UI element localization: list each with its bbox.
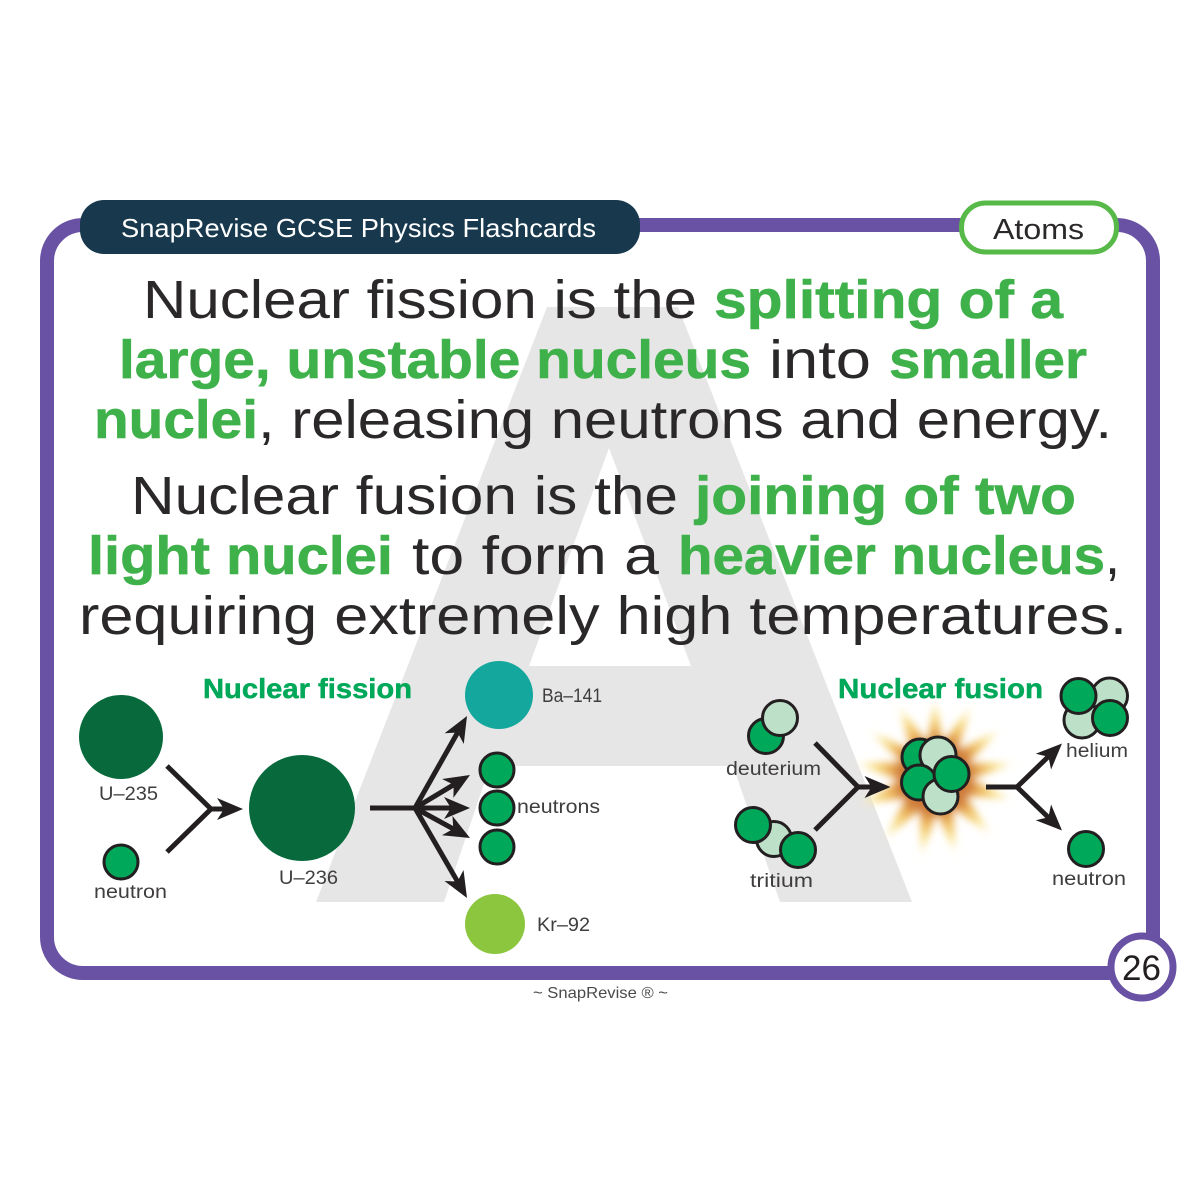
page number badge: 26 — [1122, 949, 1161, 988]
Kr-92 nucleus — [465, 894, 590, 954]
text block: nuclear fusion definition: requiring extremely high temperatures. — [79, 586, 1127, 646]
tritium: tritium — [750, 871, 813, 892]
incoming neutron: neutron — [94, 882, 167, 903]
text block: nuclear fission definition: Nuclear fission is the — [143, 270, 697, 330]
released neutrons — [480, 753, 600, 864]
incoming neutron — [94, 845, 167, 903]
U-235 nucleus: U–235 — [99, 784, 158, 805]
released neutrons: neutrons — [517, 797, 600, 818]
text block: nuclear fusion definition: light nuclei — [88, 526, 393, 586]
Ba-141 nucleus: Ba–141 — [542, 686, 602, 707]
card border — [47, 225, 1153, 973]
text block: nuclear fusion definition — [79, 466, 1127, 646]
Kr-92 nucleus: Kr–92 — [537, 915, 590, 936]
text block: nuclear fission definition: into — [769, 330, 871, 390]
text block: nuclear fission definition: nuclei — [94, 390, 258, 450]
text block: nuclear fission definition: large, unstable nucleus — [119, 330, 751, 390]
released neutron: neutron — [1052, 869, 1126, 890]
released neutron — [1052, 832, 1126, 890]
footer brand: ~ SnapRevise ® ~ — [533, 985, 668, 1002]
helium: helium — [1066, 741, 1128, 762]
header pill: deck title: SnapRevise GCSE Physics Flashcards — [121, 213, 596, 243]
U-236 nucleus — [249, 755, 355, 889]
tritium — [736, 808, 816, 892]
helium — [1061, 678, 1128, 762]
page number badge — [1111, 936, 1173, 998]
background letter A watermark — [316, 307, 912, 902]
arrow: combining into U-236 — [167, 766, 243, 852]
text block: nuclear fusion definition: heavier nucleus — [678, 526, 1105, 586]
deuterium: deuterium — [726, 759, 821, 780]
arrow: combining reactants — [815, 743, 890, 830]
topic pill: Atoms — [962, 203, 1116, 252]
topic pill: Atoms: Atoms — [993, 214, 1084, 246]
arrows: fusion products — [986, 736, 1070, 838]
U-236 nucleus: U–236 — [279, 868, 338, 889]
text block: nuclear fusion definition: Nuclear fusion is the — [131, 466, 678, 526]
heading: Nuclear fission: Nuclear fission — [203, 673, 412, 704]
arrows: fission products — [370, 711, 477, 904]
diagram: nuclear fission — [79, 661, 602, 954]
diagram: nuclear fusion — [726, 673, 1128, 892]
heading: Nuclear fusion: Nuclear fusion — [838, 673, 1043, 704]
text block: nuclear fusion definition: to form a — [412, 526, 660, 586]
text block: nuclear fusion definition: joining of two — [694, 466, 1076, 526]
U-235 nucleus — [79, 695, 163, 805]
header pill: deck title — [80, 200, 640, 254]
text block: nuclear fission definition: splitting of a — [714, 270, 1064, 330]
Ba-141 nucleus — [465, 661, 602, 729]
text block: nuclear fission definition: , releasing neutrons and energy. — [258, 390, 1112, 450]
energy burst — [854, 697, 1016, 858]
text block: nuclear fusion definition: , — [1105, 526, 1120, 586]
fusing nuclei cluster — [902, 737, 969, 814]
text block: nuclear fission definition — [94, 270, 1112, 450]
text block: nuclear fission definition: smaller — [889, 330, 1087, 390]
deuterium — [726, 700, 821, 780]
